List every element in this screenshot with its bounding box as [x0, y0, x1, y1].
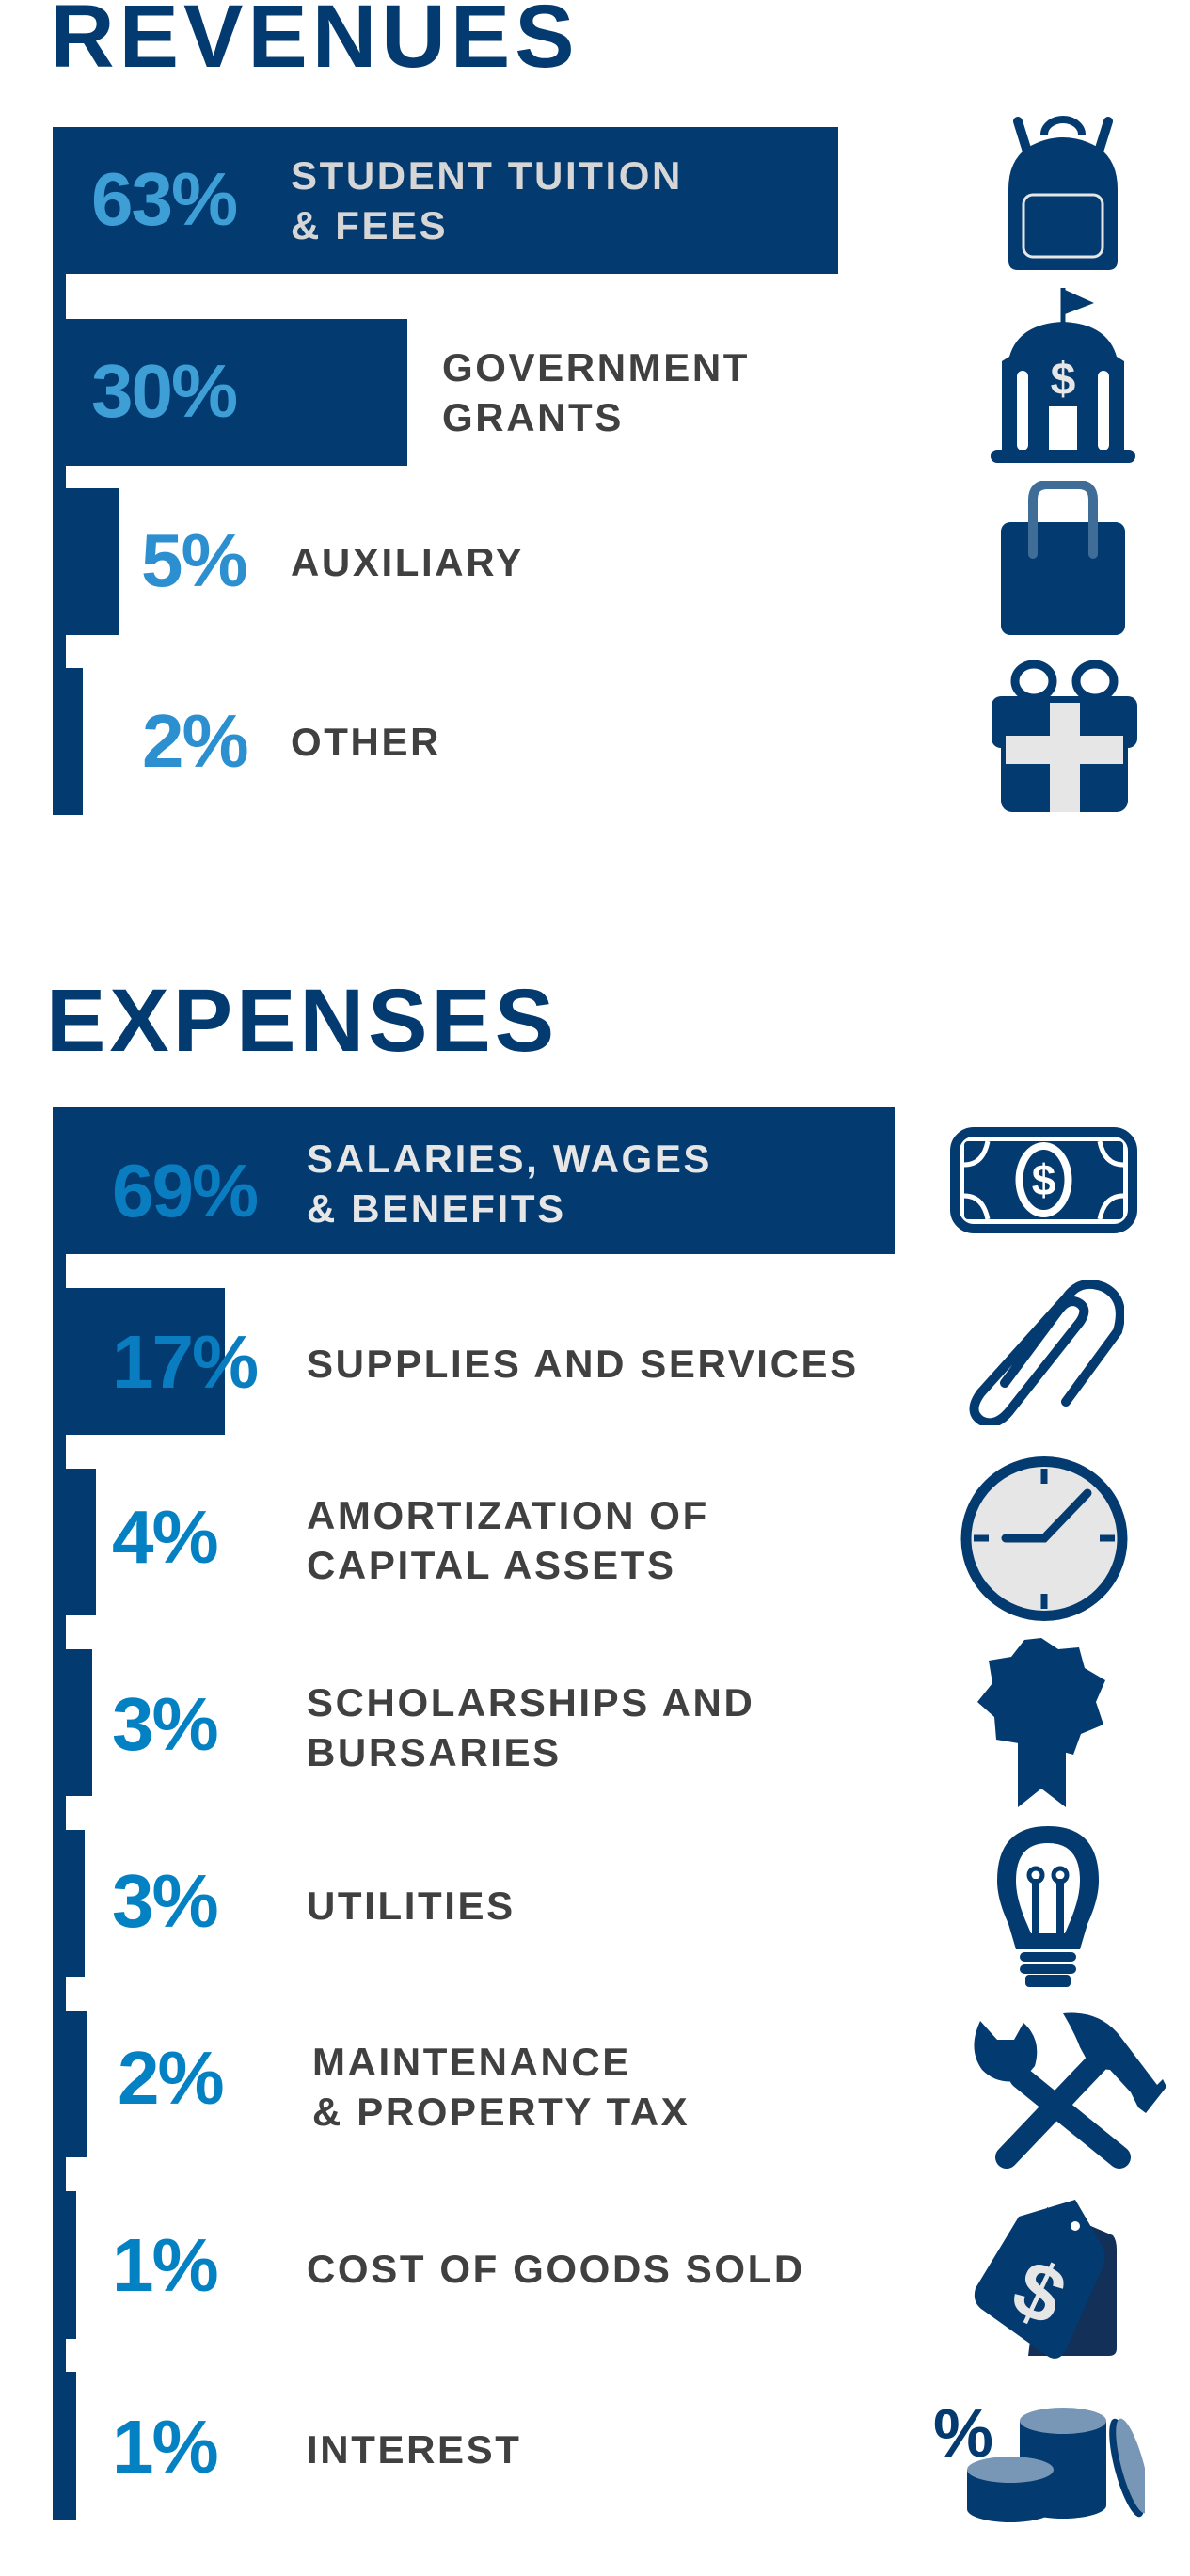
label: amortization: CAPITAL ASSETS	[307, 1543, 676, 1587]
label: interest: INTEREST	[307, 2427, 521, 2472]
icon: government building	[991, 288, 1135, 463]
label: salaries: SALARIES, WAGES	[307, 1137, 712, 1181]
label: salaries	[307, 1137, 712, 1231]
percent: 63%: 63%	[91, 157, 236, 241]
percent: 69%: 69%	[112, 1149, 257, 1232]
bar: government	[53, 319, 407, 466]
icon: backpack	[1008, 116, 1118, 270]
label: cost of goods: COST OF GOODS SOLD	[307, 2247, 805, 2291]
axis line	[53, 1107, 66, 2520]
icon: price tag	[975, 2200, 1117, 2359]
icon: price tag: $	[1000, 2242, 1079, 2344]
bar: interest	[53, 2372, 76, 2520]
icon: tools	[974, 2013, 1166, 2169]
icon: light bulb	[997, 1826, 1099, 1987]
label: supplies: SUPPLIES AND SERVICES	[307, 1342, 859, 1386]
panel: expenses chart	[53, 1107, 895, 2520]
icon: clock	[961, 1456, 1127, 1621]
bar: tuition	[53, 127, 838, 274]
icon: coins with percent	[933, 2396, 1145, 2522]
percent: 4%: 4%	[112, 1495, 217, 1579]
bar: other	[53, 668, 83, 815]
label: maintenance: & PROPERTY TAX	[312, 2090, 690, 2134]
bar: scholarships	[53, 1649, 92, 1796]
label: maintenance: MAINTENANCE	[312, 2040, 631, 2084]
percent: 3% utilities: 3%	[112, 1859, 217, 1943]
percent: 17%: 17%	[112, 1320, 257, 1404]
label: maintenance	[312, 2040, 690, 2134]
label: amortization: AMORTIZATION OF	[307, 1493, 709, 1537]
label: scholarships	[307, 1680, 754, 1774]
label: salaries: & BENEFITS	[307, 1186, 566, 1231]
label: government	[442, 345, 750, 439]
icon: shopping bag	[1001, 481, 1125, 635]
panel: revenues chart	[53, 127, 838, 815]
label: tuition: STUDENT TUITION	[291, 153, 683, 198]
percent: 5%: 5%	[141, 518, 246, 602]
label: tuition: & FEES	[291, 203, 448, 247]
label: government: GRANTS	[442, 395, 624, 439]
bar: cost of goods	[53, 2191, 76, 2339]
label: utilities: UTILITIES	[307, 1884, 516, 1928]
icon: money bill: $	[1032, 1155, 1055, 1204]
percent: 2%: 2%	[142, 699, 247, 783]
bar: utilities	[53, 1830, 85, 1977]
title: expenses: EXPENSES	[46, 971, 558, 1071]
icon: money bill	[950, 1127, 1137, 1233]
percent: 1% cogs: 1%	[112, 2223, 217, 2307]
percent: 30%: 30%	[91, 349, 236, 433]
percent: 3% scholarships: 3%	[112, 1682, 217, 1766]
label: auxiliary: AUXILIARY	[291, 540, 524, 584]
icon: government building: $	[1051, 355, 1076, 405]
axis line	[53, 127, 66, 815]
label: scholarships: SCHOLARSHIPS AND	[307, 1680, 754, 1725]
percent: 2%: 2%	[118, 2036, 223, 2120]
bar: auxiliary	[53, 488, 119, 635]
percent: 1% interest: 1%	[112, 2405, 217, 2489]
bar: amortization	[53, 1469, 96, 1615]
bar: salaries	[53, 1107, 895, 1254]
icon: paperclip	[969, 1280, 1124, 1425]
icon: gift	[992, 660, 1137, 812]
label: tuition	[291, 153, 683, 247]
bar: supplies	[53, 1288, 225, 1435]
label: government: GOVERNMENT	[442, 345, 750, 390]
label: other: OTHER	[291, 720, 441, 764]
bar: maintenance	[53, 2011, 87, 2157]
icon: award badge	[977, 1638, 1105, 1807]
icon: coins with percent: %	[933, 2396, 993, 2472]
label: scholarships: BURSARIES	[307, 1730, 562, 1774]
label: amortization	[307, 1493, 709, 1587]
